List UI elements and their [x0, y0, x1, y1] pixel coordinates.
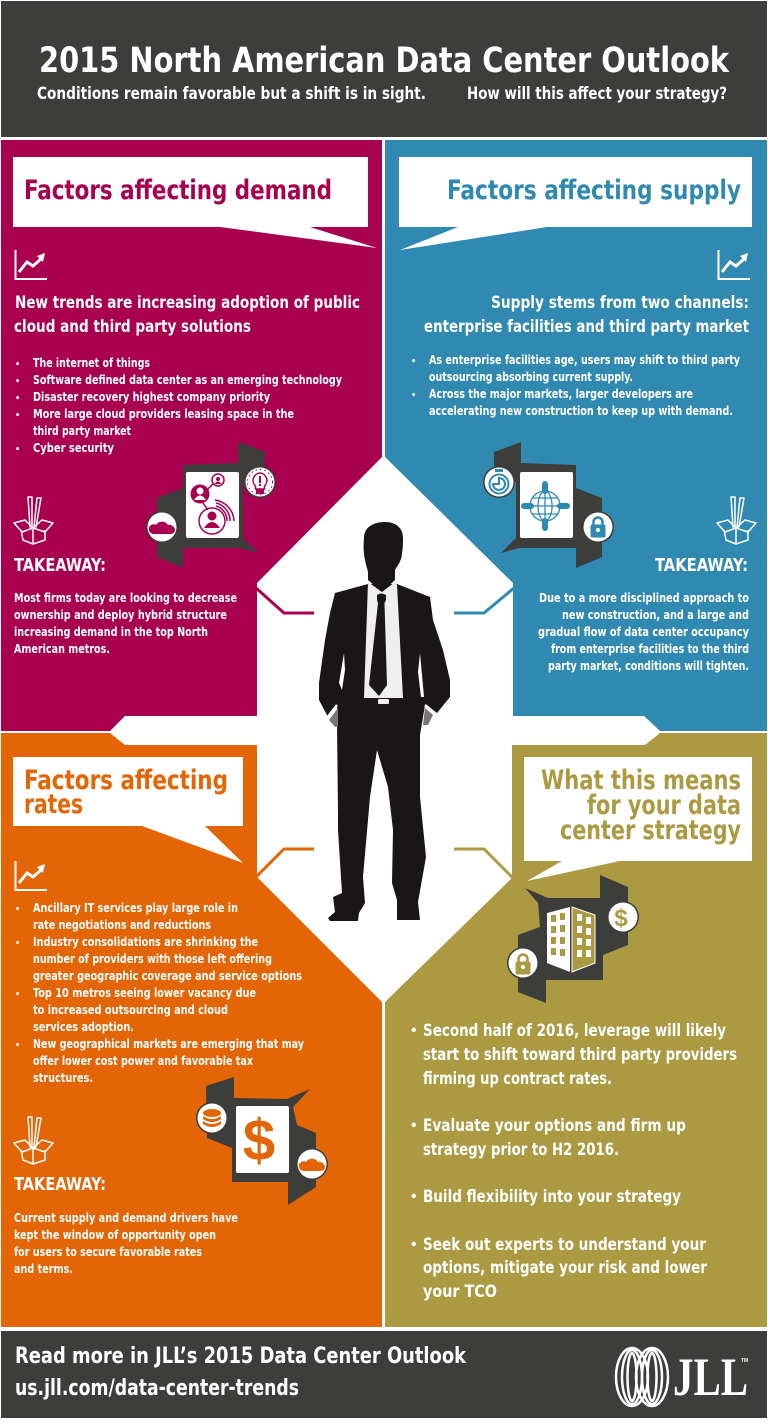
demand bullet list: •	[15, 445, 20, 455]
footer link text: Read more in JLL’s 2015 Data Center Outlook	[15, 1344, 467, 1369]
callout: strategy heading: for your data	[587, 790, 741, 821]
demand takeaway heading: TAKEAWAY:	[14, 555, 106, 576]
rates takeaway text	[14, 1211, 238, 1276]
demand takeaway text	[14, 591, 237, 656]
rates bullet list: rate negotiations and reductions	[33, 918, 211, 932]
demand subheading: cloud and third party solutions	[14, 317, 251, 337]
connector: demand	[256, 588, 314, 613]
icon: trend chart	[16, 861, 47, 890]
supply bullet list: outsourcing absorbing current supply.	[429, 370, 633, 384]
footer link text	[15, 1344, 467, 1401]
subtitle left: Conditions remain favorable but a shift is in sight.	[37, 84, 426, 104]
strategy recommendations: your TCO	[423, 1282, 497, 1302]
footer bar	[1, 1331, 767, 1418]
subtitle right: How will this affect your strategy?	[467, 84, 727, 104]
demand bullet list: The internet of things	[33, 356, 150, 370]
belt	[363, 698, 405, 705]
strategy recommendations: •	[410, 1024, 417, 1039]
strategy recommendations	[410, 1021, 737, 1302]
connector: rates	[256, 849, 314, 877]
demand bullet list: •	[15, 377, 20, 387]
icon: takeaway box	[14, 1117, 53, 1164]
supply bullet list: •	[411, 391, 416, 401]
strategy recommendations: •	[410, 1119, 417, 1134]
header bar	[1, 1, 767, 137]
tie	[369, 594, 387, 696]
demand subheading	[14, 293, 360, 337]
strategy recommendations: firming up contract rates.	[423, 1069, 612, 1089]
rates bullet list: to increased outsourcing and cloud	[33, 1003, 228, 1017]
rates bullet list: structures.	[33, 1071, 93, 1085]
strategy recommendations: Seek out experts to understand your	[423, 1235, 706, 1255]
demand bullet list: •	[15, 411, 20, 421]
JLL logo: TM	[741, 1358, 748, 1364]
callout: strategy heading: center strategy	[560, 815, 741, 846]
icon: takeaway box	[14, 497, 53, 544]
rates bullet list	[15, 901, 304, 1085]
callout: demand heading: Factors affecting demand	[24, 175, 332, 206]
demand bullet list: More large cloud providers leasing space in the	[33, 407, 294, 421]
rates bullet list: Industry consolidations are shrinking the	[33, 935, 258, 949]
icon: people network	[146, 442, 276, 568]
demand subheading: New trends are increasing adoption of public	[15, 293, 360, 313]
callout: demand heading	[13, 157, 377, 248]
rates bullet list: •	[15, 905, 20, 915]
callout: rates heading: rates	[24, 789, 83, 820]
rates takeaway text: and terms.	[14, 1262, 73, 1276]
rates bullet list: services adoption.	[33, 1020, 134, 1034]
supply takeaway text: Due to a more disciplined approach to	[539, 591, 749, 605]
icon: global network	[483, 442, 614, 568]
callout: rates heading: Factors affecting	[24, 765, 228, 796]
head	[364, 522, 403, 592]
central businessman silhouette	[319, 522, 450, 921]
demand takeaway text: increasing demand in the top North	[14, 625, 208, 639]
rates takeaway text: kept the window of opportunity open	[14, 1228, 216, 1242]
demand bullet list: •	[15, 394, 20, 404]
panel: factors affecting supply	[385, 140, 767, 731]
demand takeaway text: Most firms today are looking to decrease	[14, 591, 237, 605]
demand bullet list	[15, 356, 342, 455]
demand bullet list: Disaster recovery highest company priority	[33, 390, 270, 404]
icon: trend chart	[718, 250, 750, 279]
rates bullet list: •	[15, 990, 20, 1000]
supply takeaway text: new construction, and a large and	[562, 608, 749, 622]
jacket	[319, 584, 450, 735]
callout: supply heading: Factors affecting supply	[447, 175, 741, 206]
icon: building: $	[614, 905, 628, 932]
rates takeaway text: for users to secure favorable rates	[14, 1245, 202, 1259]
icon: building	[507, 875, 639, 1003]
rates bullet list: greater geographic coverage and service options	[33, 969, 302, 983]
connector: supply	[454, 588, 514, 613]
supply bullet list: Across the major markets, larger developers are	[429, 387, 693, 401]
rates bullet list: •	[15, 1041, 20, 1051]
strategy recommendations: strategy prior to H2 2016.	[423, 1140, 619, 1160]
strategy recommendations: Build flexibility into your strategy	[423, 1187, 681, 1207]
connector: strategy	[454, 849, 513, 878]
icon: takeaway box	[717, 497, 756, 544]
rates bullet list: Ancillary IT services play large role in	[33, 901, 238, 915]
strategy recommendations: options, mitigate your risk and lower	[423, 1258, 707, 1278]
rates takeaway text: Current supply and demand drivers have	[14, 1211, 238, 1225]
callout: strategy heading: What this means	[541, 765, 741, 796]
panel: factors affecting rates	[1, 733, 382, 1327]
panel: factors affecting demand	[1, 140, 382, 731]
icon: dollar: $	[243, 1108, 275, 1173]
demand bullet list: Software defined data center as an emerging technology	[33, 373, 342, 387]
strategy recommendations: •	[410, 1238, 417, 1253]
rates bullet list: number of providers with those left offering	[33, 952, 272, 966]
demand bullet list: third party market	[33, 424, 131, 438]
footer link text: us.jll.com/data-center-trends	[15, 1376, 299, 1401]
callout: strategy heading	[524, 757, 752, 881]
supply subheading	[424, 293, 749, 337]
supply takeaway text	[538, 591, 749, 673]
rates bullet list: •	[15, 939, 20, 949]
rates bullet list: offer lower cost power and favorable tax	[33, 1054, 253, 1068]
callout: rates heading	[13, 757, 243, 863]
icon: trend chart	[16, 250, 47, 279]
icon: dollar	[196, 1077, 328, 1205]
rates bullet list: Top 10 metros seeing lower vacancy due	[33, 986, 256, 1000]
rates bullet list: New geographical markets are emerging that may	[33, 1037, 304, 1051]
JLL logo	[616, 1347, 748, 1407]
trousers	[328, 725, 426, 921]
strategy recommendations: •	[410, 1190, 417, 1205]
arm gaps	[339, 653, 424, 697]
demand takeaway text: American metros.	[14, 642, 110, 656]
shirt	[364, 582, 403, 698]
demand bullet list: Cyber security	[33, 441, 114, 455]
strategy recommendations: Second half of 2016, leverage will likely	[423, 1021, 726, 1041]
supply bullet list: accelerating new construction to keep up with demand.	[429, 404, 733, 418]
demand takeaway text: ownership and deploy hybrid structure	[14, 608, 227, 622]
rates takeaway heading: TAKEAWAY:	[14, 1174, 106, 1195]
supply takeaway text: gradual flow of data center occupancy	[538, 625, 749, 639]
demand bullet list: •	[15, 360, 20, 370]
cuffs and hands	[327, 705, 436, 727]
supply takeaway heading: TAKEAWAY:	[655, 555, 748, 576]
strategy recommendations: Evaluate your options and firm up	[423, 1116, 686, 1136]
callout: supply heading	[399, 157, 752, 250]
supply bullet list	[411, 353, 740, 418]
supply bullet list: •	[411, 357, 416, 367]
panel: data center strategy	[385, 733, 767, 1327]
